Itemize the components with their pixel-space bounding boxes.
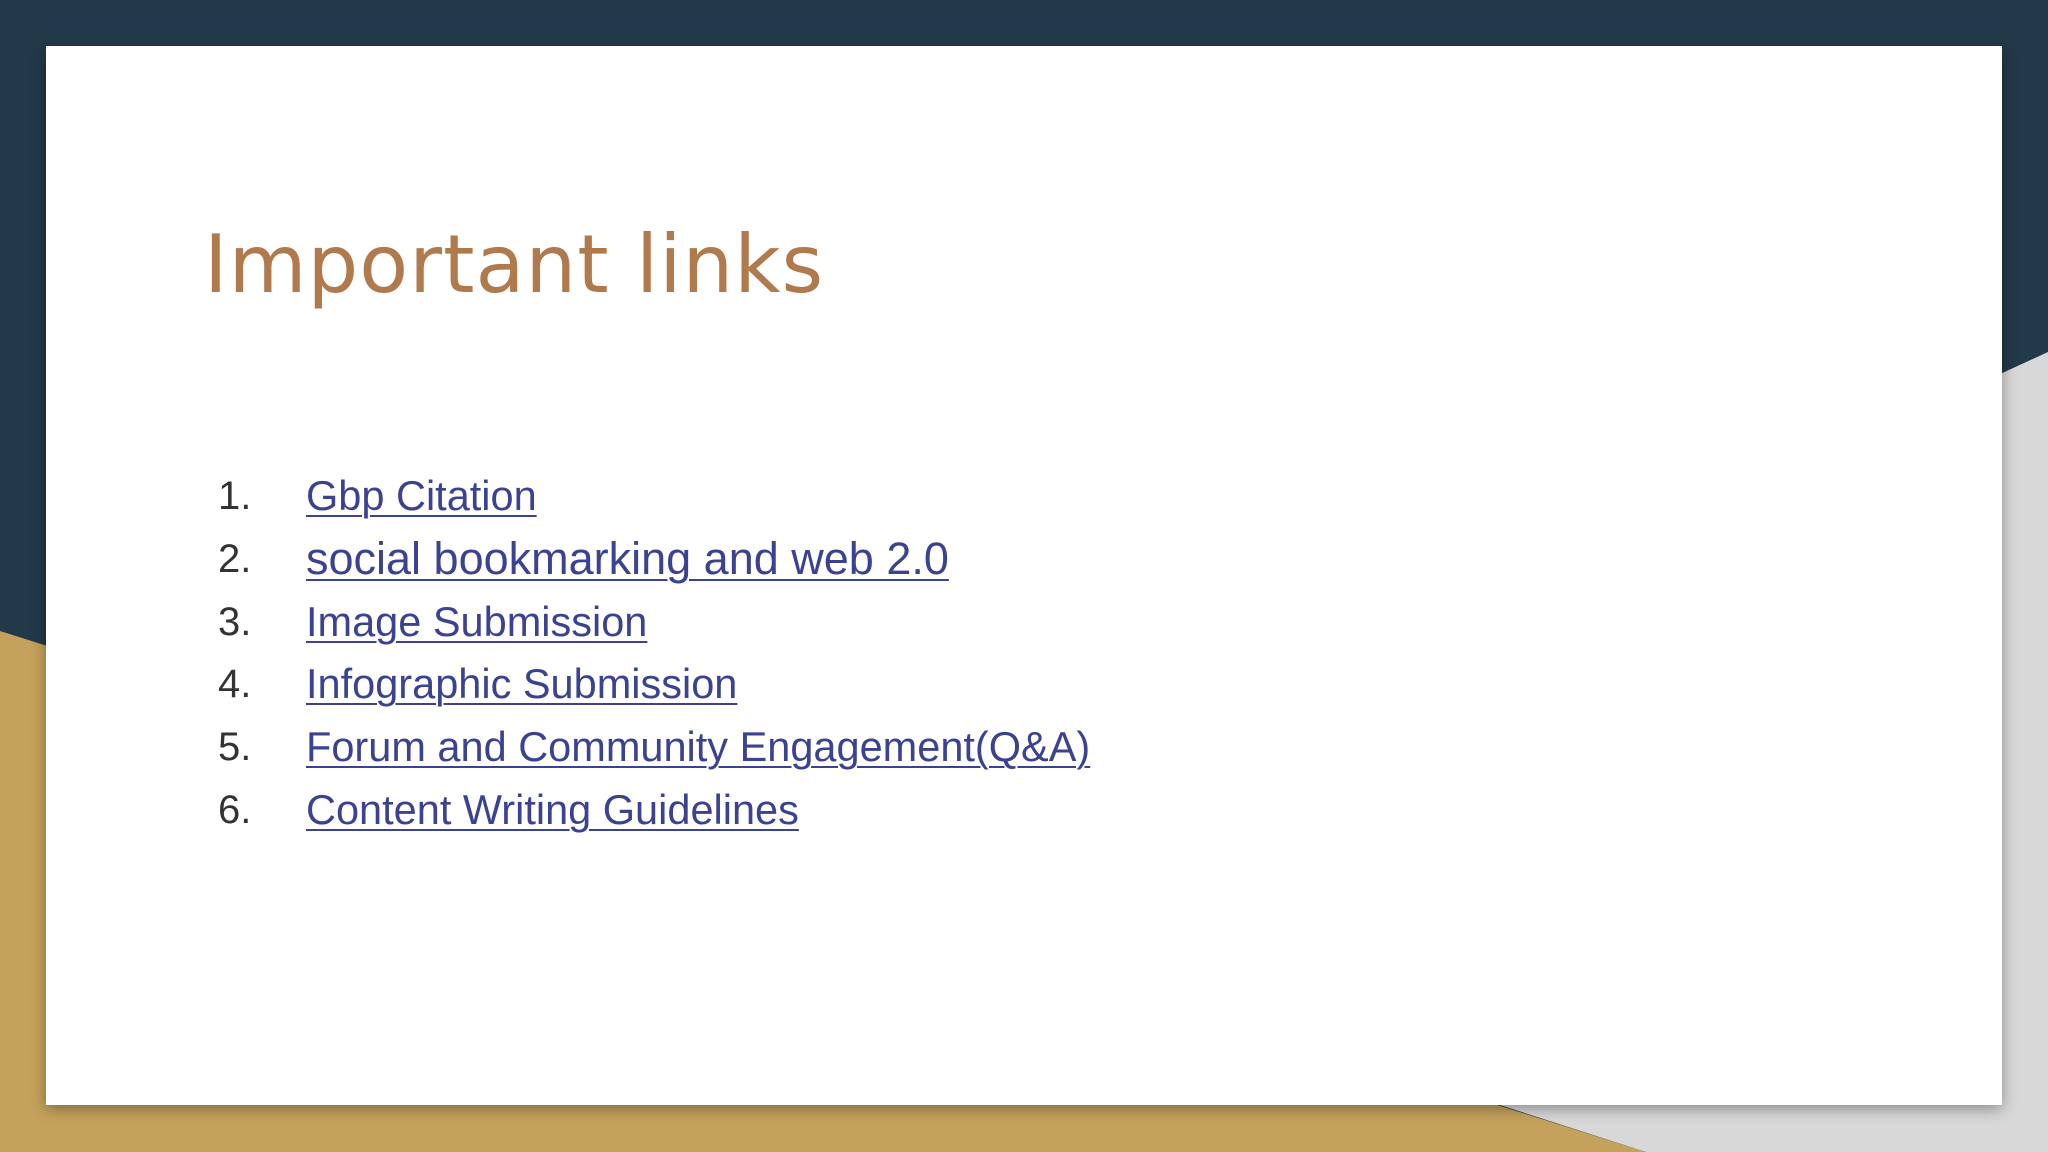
link item 3: [218, 598, 648, 645]
text: 2.: [218, 537, 251, 581]
text: 4.: [218, 662, 251, 706]
text: 1.: [218, 474, 251, 518]
links list: [218, 472, 1090, 833]
text: 3.: [218, 600, 251, 644]
text: Content Writing Guidelines: [306, 786, 799, 833]
text: Gbp Citation: [306, 472, 537, 519]
text: 5.: [218, 725, 251, 769]
text: social bookmarking and web 2.0: [306, 533, 949, 584]
link item 2: [218, 533, 949, 584]
text: Infographic Submission: [306, 660, 737, 707]
link item 1: [218, 472, 537, 519]
text: Forum and Community Engagement(Q&A): [306, 723, 1090, 770]
link item 6: [218, 786, 799, 833]
text: Image Submission: [306, 598, 647, 645]
link item 5: [218, 723, 1090, 770]
link item 4: [218, 660, 738, 707]
title: Important links: [204, 218, 824, 311]
text: 6.: [218, 788, 251, 832]
